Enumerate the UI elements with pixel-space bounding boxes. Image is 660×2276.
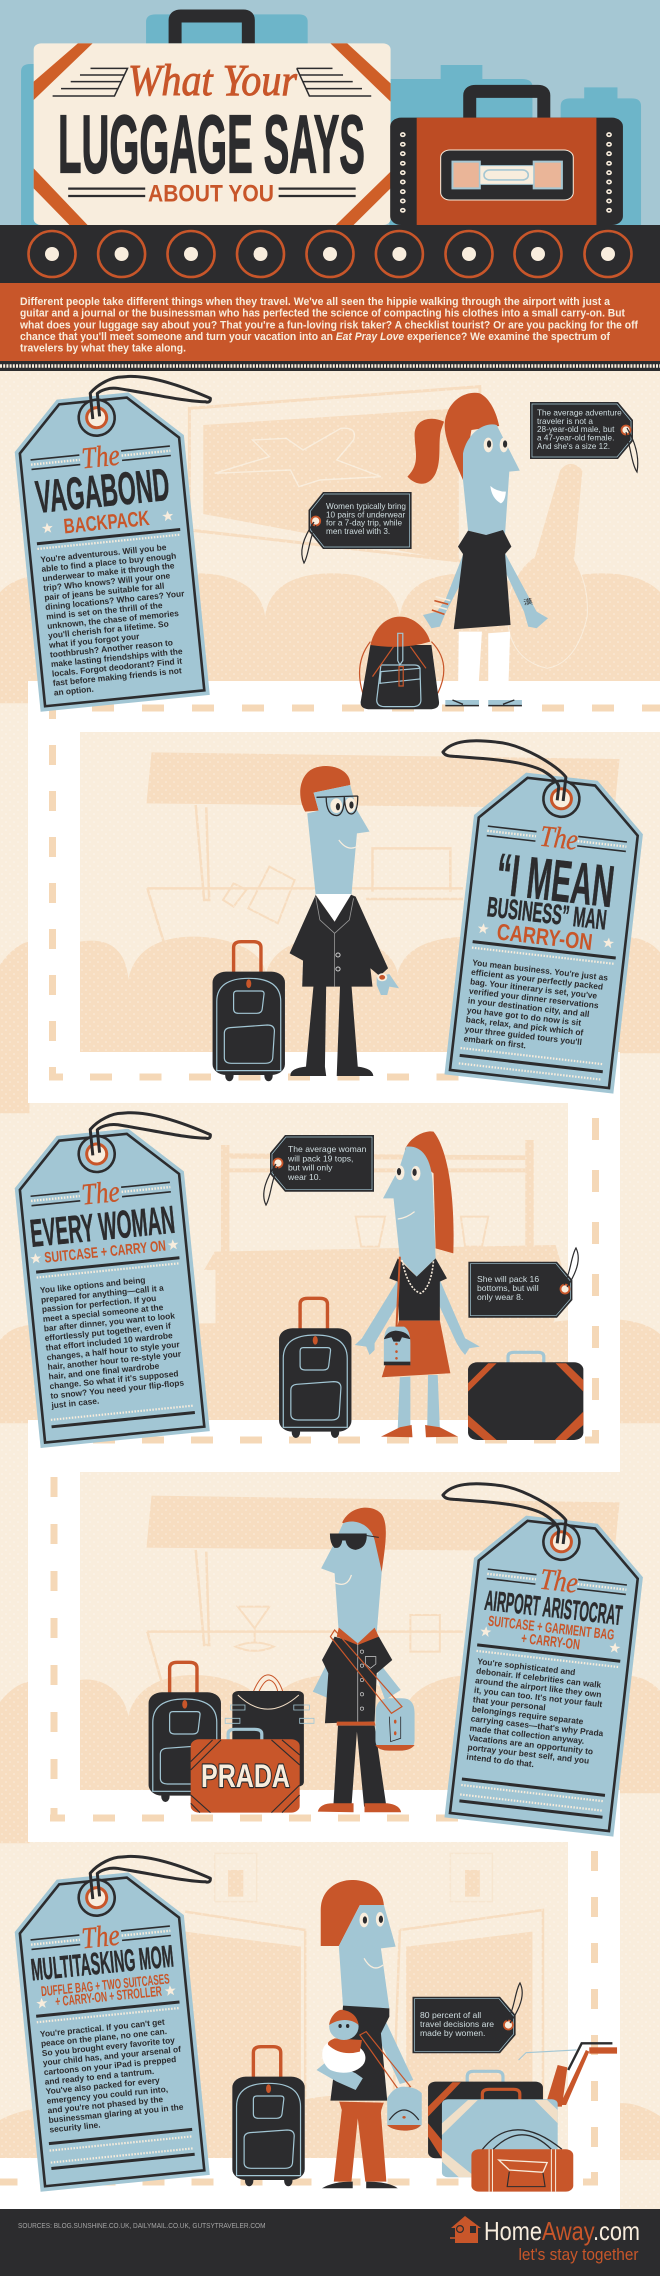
divider [37,529,181,549]
tag: every woman [8,1105,240,1448]
body text: cartoons on your iPad is prepped [43,2054,177,2077]
body text: effortlessly put together, even if [44,1320,171,1343]
tag: airport aristocrat [407,1479,651,1837]
callout: tops: The average woman [288,1144,367,1154]
footer rules [49,2129,195,2169]
body text: hair, another hour to re-style your [47,1349,182,1372]
eyes [484,438,493,452]
body text: You're practical. If you can't get [39,2017,165,2039]
lapels [316,897,354,987]
blue suitcase [442,2089,558,2177]
back blue suitcases [21,14,641,225]
body text: and you're not phased by the [47,2094,164,2115]
skirt [382,1321,450,1377]
body text: belongings require separate [471,1704,584,1726]
tag body [10,387,210,712]
callout: adventure traveler: traveler is not a [537,417,593,426]
body text: carrying cases—that's why Prada [470,1713,604,1738]
heading: VAGABOND [33,458,172,523]
tagline: let's stay together [518,2245,639,2264]
arms [355,1280,480,1355]
body text: you have got to do now is sit [466,1005,582,1028]
background: restroom doors scene section 5 [0,1853,660,2160]
intro panel: Different people take different things when they travel. We've all seen the hippie walking through the airport with just a [20,296,611,308]
arms [313,1665,401,1700]
trousers [333,1726,386,1807]
black suitcase [508,1352,544,1363]
sunglasses [330,1534,379,1549]
body text: that effort included 10 wardrobe [45,1330,173,1353]
tag body [444,1510,648,1837]
intro panel: travelers by what they take along. [20,343,186,355]
body text: You've also packed for every [45,2075,160,2096]
body text: make lasting friendships with the [50,646,183,669]
shoes [318,1803,401,1812]
subheading: CARRY-ON [496,918,594,955]
callout: tops: will pack 19 tops, [287,1154,353,1164]
body text: efficient as your perfectly packed [471,967,604,992]
tag body [10,1867,210,2192]
callout: underwear [302,492,412,563]
body text: change. So what if it's supposed [49,1368,179,1391]
intro panel [0,283,660,361]
body text: fast before making friends is not [52,665,182,688]
stars [36,1985,176,2009]
header: sky background [0,0,660,225]
callout: travel decisions [412,1983,522,2053]
tag: every woman: EVERY WOMAN [28,1199,177,1256]
the: The [80,1919,121,1955]
luggage string [89,1105,211,1155]
head and neck [307,785,370,895]
body text: verified your dinner reservations [469,986,599,1010]
prada suitcase [191,1729,300,1813]
head and neck [339,1905,396,2008]
divider [36,2002,180,2022]
title [58,56,365,208]
divider [477,1645,620,1667]
carousel belt [0,225,660,283]
title suitcase body [34,43,391,225]
garment bag [225,1675,314,1787]
black handle of title case [175,16,248,43]
character: vagabond woman [360,393,548,709]
luggage string [439,736,569,801]
callout: adventure traveler: The average adventure [537,408,622,418]
body text: your three guided tours you'll [464,1024,582,1047]
divider [472,942,616,964]
right arm [378,2020,413,2084]
intro panel: guitar and a journal or the businessman who has perfected the science of compacting his clothes into a small carry-on. But [20,308,625,320]
body text: You like options and being [39,1275,146,1295]
luggage string [89,1848,211,1899]
bag strap [360,2032,410,2092]
backpack [360,642,444,693]
body text: you'll cherish for a lifetime. So [48,618,169,640]
stars [480,1626,621,1653]
the: The [80,439,121,475]
smile [339,840,357,848]
callout: underwear: men travel with 3. [326,527,390,536]
intro panel: what does your luggage say about you? That you're a fun-loving risk taker? A checklist tourist? Or are you packing for the off [19,319,638,331]
body text: pair of jeans be suitable for all [44,581,165,602]
rolling suitcase [149,1662,221,1802]
bag strap [330,1630,402,1713]
body text: mind is set on the thrill of the [46,600,163,621]
body text: underwear to make it through the [42,560,175,583]
tag: i mean business man [407,736,651,1094]
shirt [322,1637,392,1723]
body text [466,1656,611,1777]
rolling suitcase [213,942,285,1081]
body text: your child has, and your arsenal of [42,2044,182,2068]
luggage string [89,368,211,419]
stroller [519,2043,617,2107]
shirt collar [316,894,351,922]
callout: bottoms [468,1248,578,1318]
body text: trip? Who knows? Will your one [43,570,171,593]
arms [423,552,548,628]
body text [38,1272,186,1410]
body text: peace on the plane, no one can. [40,2026,167,2049]
hair [321,1880,384,1946]
floor: dashed route [0,699,660,2182]
callout: adventure traveler: And she's a size 12. [537,442,610,451]
mouth [490,486,506,503]
body text: passion for perfection. If you [41,1293,157,1314]
hair [300,766,350,812]
tag: multitasking mom: MULTITASKING MOM [29,1938,175,1987]
body text: embark on first. [463,1033,527,1050]
tag body [444,767,648,1094]
character: multitasking mom [232,1880,617,2192]
head and neck [463,424,520,535]
callout: bottoms: bottoms, but will [477,1283,539,1293]
title line 1: What Your [128,56,298,105]
body text: hair, and one final wardrobe [48,1361,160,1382]
body text [39,541,194,698]
duffle bag [471,2130,573,2192]
callout: adventure traveler: a 47-year-old female. [537,434,614,442]
shirt buttons [358,1643,376,1722]
rolling suitcase [232,2047,305,2186]
speed lines [53,68,371,96]
smile [398,1212,415,1219]
character: airport aristocrat [149,1508,415,1813]
legs [458,632,510,700]
belt [337,1722,375,1726]
body text: locals. Forgot deodorant? Find it [51,656,183,679]
callout: underwear: for a 7-day trip, while [326,519,402,528]
prada label: PRADA [201,1758,290,1794]
body text: meet a special someone at the [42,1302,164,1324]
footer rules [459,1779,605,1817]
the: The [80,1175,121,1212]
diaper bag [387,2087,422,2131]
callout: bottoms: She will pack 16 [477,1274,539,1284]
head and neck [321,1521,382,1643]
shoulder bag [396,1257,400,1327]
black suitcase [428,2071,543,2158]
red suitcase rivets [401,133,611,212]
body text: what if you forgot your [48,631,141,650]
legs [290,985,373,1076]
character: every woman [279,1131,583,1440]
rules beside about you [68,189,356,196]
callout: travel decisions: 80 percent of all [420,2010,481,2020]
callout: tops: but will only [288,1163,333,1173]
footer rules [459,1048,604,1080]
shoes [322,2182,398,2188]
hair [342,1508,386,1572]
floor: white winding path [0,681,660,2209]
tag: the vagabond [8,368,240,712]
body text: just in case. [50,1396,100,1410]
callout: bottoms: only wear 8. [477,1292,523,1302]
body text: bar after dinner, you want to look [43,1310,176,1333]
body text: dining locations? Who cares? Your [45,588,186,612]
body text: debonair. If celebrities can walk [476,1666,602,1690]
footer rules [51,1406,195,1427]
body text: back, relax, and pick which of [465,1014,584,1038]
sources: SOURCES: BLOG.SUNSHINE.CO.UK, DAILYMAIL.CO.UK, GUTSYTRAVELER.COM [18,2221,266,2230]
body text: Vacations are an opportunity to [468,1732,594,1756]
body text: intend to do that. [466,1751,535,1769]
body text: to snow? You need your flip-flops [50,1377,185,1401]
icon: homeaway birdhouse logo [450,2216,481,2243]
callout: adventure traveler: 28-year-old male, but [537,425,615,434]
shoes [381,1425,458,1437]
glasses and eyes [317,796,358,816]
smile [364,1958,383,1968]
rolling suitcase [279,1298,351,1438]
body text: it, you can too. It's not your fault [474,1685,603,1709]
callout: travel decisions: made by women. [420,2028,485,2038]
necklace [402,1260,434,1293]
body text: portray your best self, and you [467,1742,590,1766]
body text [463,957,609,1059]
title line 3: ABOUT YOU [148,180,274,208]
divider [36,1258,180,1278]
body text [39,2015,188,2134]
footer [0,2209,660,2276]
orange corner straps [34,43,391,225]
body text: businessman glaring at you in the [48,2102,184,2125]
header: luggage on carousel illustration [21,14,641,225]
collar [337,1628,379,1645]
luggage string [439,1479,569,1544]
body text: bag. Your itinerary is set, you've [470,976,598,1001]
flip-flops [445,700,522,705]
bracelets [432,597,450,614]
the: The [538,1563,580,1600]
logo wordmark: HomeAway.com [484,2216,640,2246]
subheading line 1: DUFFLE BAG + TWO SUITCASES [40,1970,170,1999]
tag: multitasking mom [8,1848,240,2192]
body text: in your destination city, and all [467,995,590,1019]
background: cocktail lounge scene section 4 [0,1496,660,1843]
red suitcase handle [470,91,544,118]
shoulder bag [375,1698,415,1751]
body text: and ready to end a tantrum. [44,2066,155,2087]
hand and watch [377,974,399,995]
body text: emergency you could run into, [46,2084,168,2106]
subheading: SUITCASE + CARRY ON [44,1238,167,1267]
background: departure board scene section 1 [0,387,660,703]
subheading: BACKPACK [63,507,151,538]
stars [477,923,614,948]
top [389,1258,447,1321]
body text: You mean business. You're just as [472,957,609,983]
background: bar scene section 3 [0,1140,660,1423]
top [454,530,511,629]
body text: prepared for anything—call it a [40,1282,164,1305]
stars [30,1239,179,1264]
subheading line 2: + CARRY-ON + STROLLER [54,1983,163,2009]
character: business man [213,766,399,1081]
red suitcase body [390,118,623,225]
head and neck [383,1147,436,1277]
body text: around the airport like they own [475,1675,602,1699]
body text: security line. [49,2119,101,2134]
tattoo: 漠 [522,597,534,607]
callout: tops: wear 10. [287,1172,321,1182]
body text: unknown, the chase of memories [47,608,179,631]
body text: able to find a place to buy enough [41,550,177,574]
trousers [334,2102,386,2182]
body text: made that collection anyway. [469,1723,585,1746]
jacket [290,894,388,987]
body text: You're adventurous. Will you be [40,542,167,564]
body text: You're sophisticated and [477,1656,576,1677]
callout: adventure traveler [530,402,638,472]
callout: underwear: 10 pairs of underwear [326,510,405,519]
subheading line 2: + CARRY-ON [520,1631,581,1653]
ponytail [407,393,499,484]
body text: changes, a half hour to style your [46,1339,181,1362]
background: airport lounge scene section 2 [0,752,660,1113]
stars [41,510,174,533]
body text: So you brought every favorite toy [41,2035,176,2058]
callout: underwear: Women typically bring [326,502,406,511]
eyes [395,1165,404,1180]
hair [405,1131,454,1253]
smile [335,1575,351,1584]
callout: tops [264,1135,374,1205]
baby and blanket [317,2010,365,2090]
intro panel: chance that you'll meet someone and turn your vacation into an Eat Pray Love experience? We examine the spectrum of [20,331,610,343]
body text: toothbrush? Another reason to [49,637,173,659]
body text: an option. [53,684,94,698]
callout: travel decisions: travel decisions are [420,2019,494,2029]
red suitcase buckle [441,150,573,200]
tag body [10,1124,210,1448]
legs [398,1375,440,1428]
eyes [359,1913,369,1927]
the: The [538,820,580,857]
body text: that your personal [472,1694,546,1712]
dotted divider bar [0,361,660,371]
shirt [330,2006,389,2101]
